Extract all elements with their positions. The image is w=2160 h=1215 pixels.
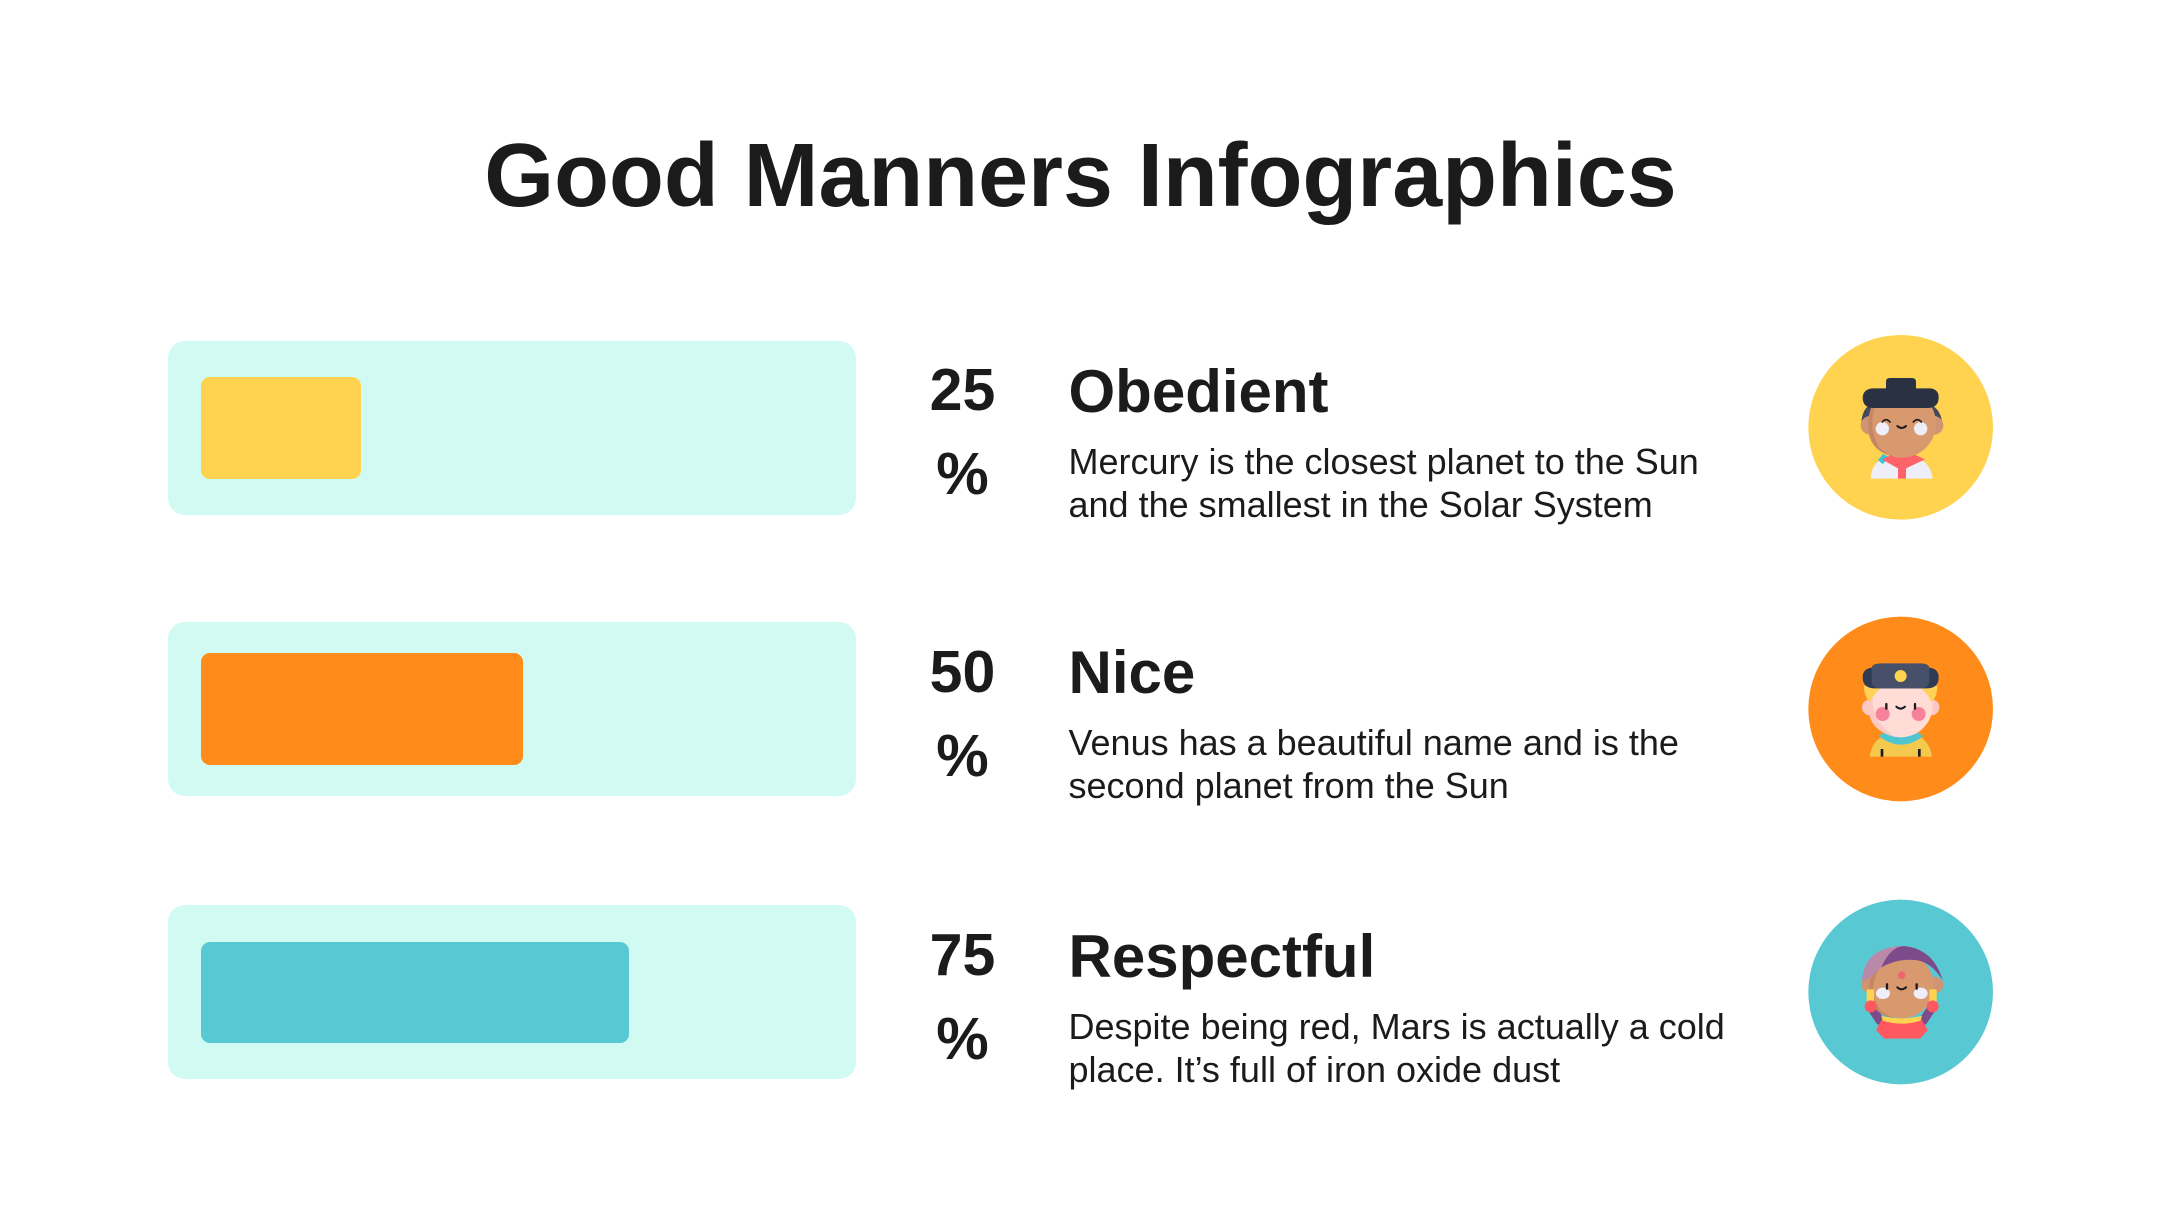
bar track: Obedient — [168, 340, 856, 514]
description: Nice: second planet from the Sun — [1068, 765, 1509, 806]
heading: Respectful: Respectful — [1068, 923, 1375, 990]
bar fill: Obedient 25% — [201, 377, 361, 479]
title: Good Manners Infographics — [484, 126, 1677, 226]
bar fill: Nice 50% — [201, 653, 522, 765]
description: Obedient: and the smallest in the Solar System — [1068, 484, 1653, 524]
bar track: Respectful — [168, 905, 856, 1079]
bar fill: Respectful 75% — [201, 942, 628, 1043]
percentage: 75%: % — [936, 1006, 989, 1072]
icon: woman with purple headscarf on teal circle — [1808, 900, 1993, 1084]
percentage: 25%: % — [936, 441, 989, 507]
percentage: 25%: 25 — [930, 357, 995, 423]
percentage: 75% — [930, 922, 995, 1072]
description: Respectful: Despite being red, Mars is actually a cold — [1068, 1006, 1725, 1046]
description: Obedient — [1068, 440, 1699, 524]
heading: Nice: Nice — [1068, 639, 1195, 706]
description: Nice — [1068, 722, 1679, 806]
percentage: 50% — [930, 639, 995, 789]
percentage: 50%: % — [936, 723, 989, 789]
description: Respectful — [1068, 1006, 1725, 1090]
bar track: Nice — [168, 622, 856, 796]
icon: boy with dark hat on yellow circle — [1808, 335, 1993, 520]
icon: blond child with navy cap on orange circle — [1808, 617, 1993, 801]
percentage: 25% — [930, 357, 995, 507]
percentage: 75%: 75 — [930, 922, 995, 988]
description: Nice: Venus has a beautiful name and is the — [1068, 722, 1679, 763]
description: Obedient: Mercury is the closest planet to the Sun — [1068, 440, 1699, 482]
heading: Obedient: Obedient — [1068, 358, 1329, 425]
description: Respectful: place. It’s full of iron oxide dust — [1068, 1048, 1560, 1090]
percentage: 50%: 50 — [930, 639, 995, 705]
